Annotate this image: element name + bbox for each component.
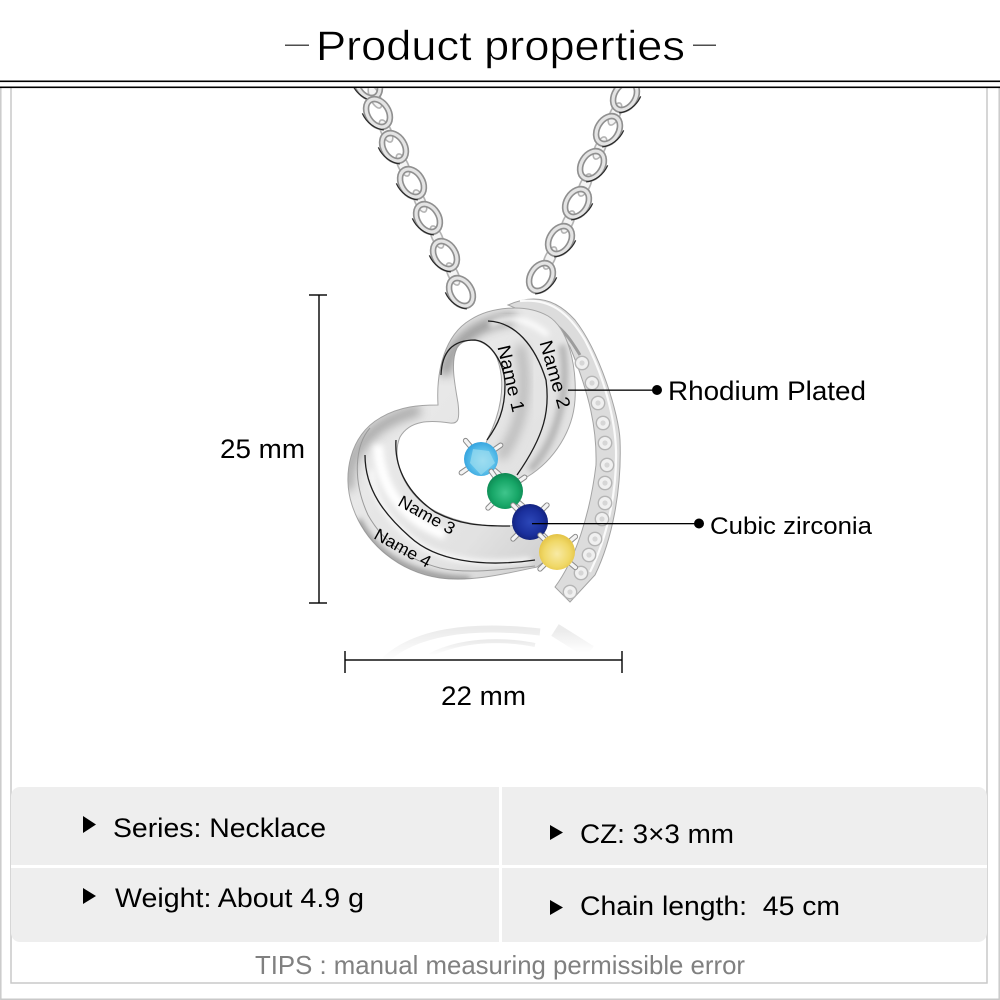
gem: green [487, 471, 525, 509]
gem: yellow [539, 534, 575, 570]
callout: rhodium plated [568, 376, 866, 406]
engraved names: Name 2 [536, 338, 575, 411]
cubic zirconia arc [508, 299, 620, 602]
engraved grooves [365, 321, 547, 563]
heart shading [348, 318, 564, 580]
spec: cz size: CZ: 3×3 mm [580, 819, 734, 849]
engraved names: Name 4 [371, 525, 434, 572]
dimension: height: 25 mm [220, 434, 305, 464]
spec: chain length: Chain length: 45 cm [580, 891, 840, 921]
spec: weight: Weight: About 4.9 g [115, 883, 364, 913]
necklace chain: left [354, 88, 476, 310]
engraved names: Name 3 [395, 492, 458, 539]
spec: series: Series: Necklace [113, 813, 326, 843]
callout: rhodium plated: Rhodium Plated [668, 376, 866, 406]
necklace chain: right [526, 88, 642, 294]
engraved names: Name 1 [493, 343, 529, 414]
dimension: width: 22 mm [441, 681, 526, 711]
engraved names [371, 338, 575, 572]
gem: navy [512, 504, 548, 540]
gem: light blue [461, 441, 501, 476]
tips note: TIPS : manual measuring permissible error [255, 950, 745, 980]
pendant reflection [385, 629, 590, 660]
callout: cubic zirconia [532, 513, 872, 540]
heart body [348, 308, 575, 579]
header rules [0, 80, 1000, 88]
title: Product properties [316, 22, 685, 69]
pendant [348, 299, 620, 602]
callout: cubic zirconia: Cubic zirconia [710, 513, 872, 540]
specification table [11, 787, 987, 942]
